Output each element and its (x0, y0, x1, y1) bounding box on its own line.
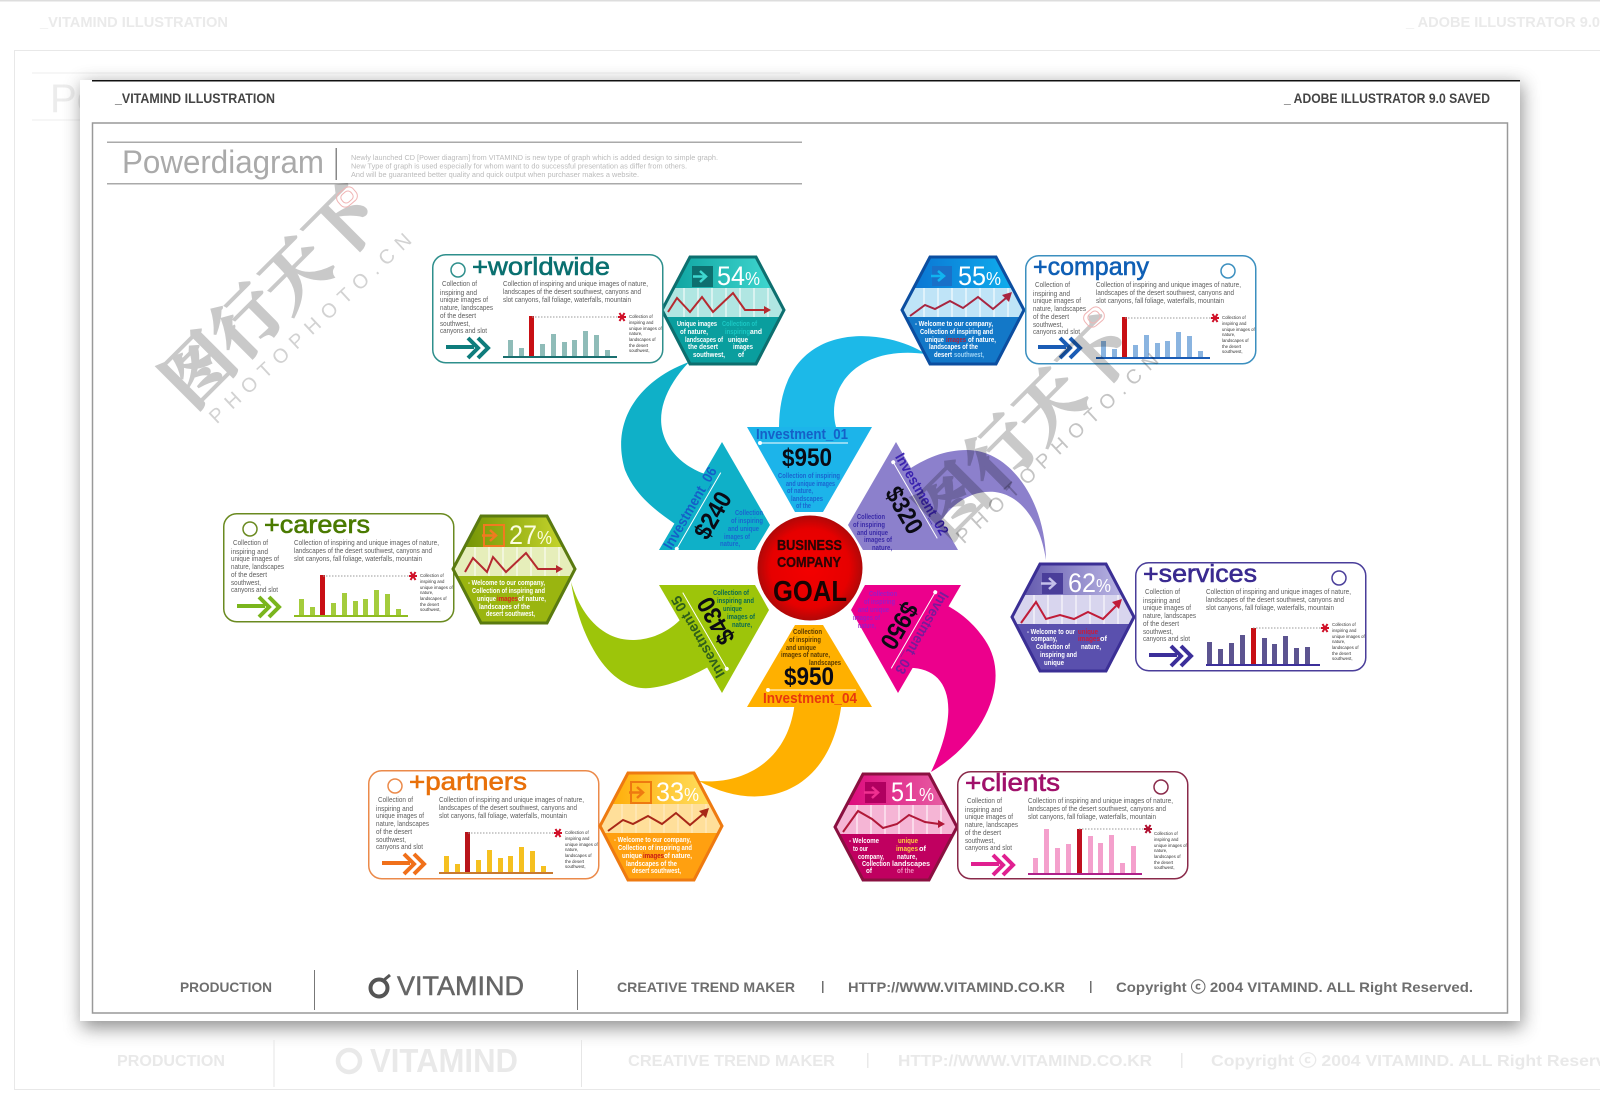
card: partners: canyons and slot (376, 842, 424, 851)
segment: investment 04 (747, 625, 872, 707)
hexagon: clients 51%: of (919, 844, 926, 853)
card: worldwide: nature, landscapes (440, 303, 493, 312)
hexagon: clients 51%: of (866, 866, 872, 875)
segment: investment 06: nature, (720, 539, 740, 548)
ghost footer: Copyright ⓒ 2004 VITAMIND. ALL Right Reserved. (1211, 1051, 1600, 1070)
card: clients: slot canyons, fall foliage, waterfalls, mountain (1028, 812, 1156, 821)
line chart (843, 811, 945, 832)
card: careers: inspiring and (420, 579, 445, 584)
hexagon: careers 27%: % (537, 528, 552, 548)
percent: 33 (656, 777, 684, 807)
card: worldwide: Collection of (629, 314, 653, 319)
segment: investment 03: and unique (858, 605, 889, 614)
segment: investment 01: landscapes (791, 494, 823, 503)
card: services: Collection of inspiring and unique images of nature, (1206, 587, 1351, 596)
hexagon: partners 33%: Collection of inspiring and (618, 843, 692, 852)
card: company: nature, landscapes (1033, 304, 1086, 313)
card: partners: slot canyons, fall foliage, waterfalls, mountain (439, 811, 567, 820)
segment: investment 05: $430 (692, 592, 741, 649)
segment: investment 06: $240 (689, 487, 738, 544)
icon (629, 782, 651, 803)
card: services: landscapes of the desert southwest, canyons and (1206, 595, 1344, 604)
line chart (465, 553, 563, 573)
card: careers: landscapes of the desert southwest, canyons and (294, 546, 432, 555)
hexagon: clients 51%: images (896, 844, 918, 853)
line chart (910, 292, 1012, 316)
card: services: nature, (1332, 639, 1345, 644)
arrow (446, 338, 488, 358)
hexagon: careers 27% (453, 516, 575, 623)
hexagon: company 55%: images (946, 335, 966, 344)
description: Newly launched CD [Power diagram] from VITAMIND is new type of graph which is added design to simple graph. (351, 155, 718, 162)
hexagon: company 55%: of nature, (968, 335, 996, 344)
card: services: inspiring and (1143, 596, 1180, 605)
card: careers: southwest, (231, 578, 261, 587)
hexagon: partners 33%: % (684, 785, 699, 805)
hexagon: services 62%: unique (1078, 627, 1098, 636)
card: clients (958, 769, 1188, 879)
hexagon: careers 27%: of nature, (518, 594, 546, 603)
bar chart (294, 572, 417, 617)
card: company: slot canyons, fall foliage, waterfalls, mountain (1096, 296, 1224, 305)
icon (692, 266, 713, 287)
hexagon: careers 27%: - Welcome to our company, (468, 578, 545, 587)
arrow: teal to investment 06 (621, 362, 705, 524)
watermark: right: PHOTOPHOTO.CN (952, 349, 1163, 548)
hexagon: worldwide 54% (662, 257, 784, 364)
percent: 51 (891, 777, 917, 807)
hexagon: clients 51%: of the (897, 866, 914, 875)
percent: 55 (958, 261, 986, 291)
card: worldwide: southwest, (629, 348, 650, 353)
card: careers: southwest, (420, 607, 441, 612)
card: services: the desert (1332, 651, 1352, 656)
hexagon: careers 27%: images (497, 594, 518, 603)
card: company: southwest, (1033, 320, 1063, 329)
card: careers: unique images of (231, 554, 280, 563)
segment: investment 05: images of (727, 612, 755, 621)
main white panel (80, 80, 1520, 1021)
segment: investment 04: images of nature, (781, 650, 830, 659)
hexagon: services 62%: company, (1031, 634, 1057, 643)
segment: investment 03: Collection (869, 589, 897, 598)
card: company: canyons and slot (1033, 327, 1081, 336)
card: clients: Collection of inspiring and unique images of nature, (1028, 796, 1173, 805)
segment: investment 04: Collection (793, 627, 822, 636)
card: partners (369, 768, 599, 879)
line chart (608, 808, 709, 831)
card: careers: slot canyons, fall foliage, waterfalls, mountain (294, 554, 422, 563)
card: partners: of the desert (376, 827, 413, 836)
segment: investment 02 (848, 442, 958, 553)
footer: PRODUCTION (180, 979, 272, 995)
hexagon: careers 27%: landscapes of the (479, 602, 530, 611)
card: services: unique images of (1143, 603, 1192, 612)
card: partners: nature, landscapes (376, 819, 429, 828)
percent: 27 (509, 520, 537, 550)
header left label: _VITAMIND ILLUSTRATION (114, 90, 275, 106)
card: clients: Collection of (1154, 831, 1178, 836)
card: services: inspiring and (1332, 628, 1357, 633)
card: careers: Collection of inspiring and unique images of nature, (294, 538, 439, 547)
card: worldwide: inspiring and (629, 320, 654, 325)
card: company: Collection of (1222, 315, 1246, 320)
hexagon: clients 51%: nature, (897, 852, 917, 861)
segment: investment 03 (851, 574, 961, 693)
arrow: pink to investment 03 (905, 600, 996, 772)
card: company: landscapes of (1222, 338, 1249, 343)
hexagon: clients 51%: to our (853, 844, 868, 853)
card: services: southwest, (1332, 656, 1353, 661)
icon (864, 782, 886, 803)
card: company: of the desert (1033, 312, 1070, 321)
segment: investment 02: $320 (879, 482, 928, 539)
hexagon: services 62%: nature, (1081, 642, 1101, 651)
arrow: green to investment 05 (571, 582, 710, 688)
hexagon: worldwide 54%: unique (728, 335, 748, 344)
ghost page backdrop: _VITAMIND ILLUSTRATION (39, 14, 228, 31)
hexagon: partners 33%: desert southwest, (632, 866, 681, 875)
segment: investment 03: Investment_03 (891, 589, 951, 676)
icon (482, 525, 504, 546)
card: clients: unique images of (965, 812, 1014, 821)
centre goal circle: BUSINESS (777, 537, 842, 554)
arrow: purple to investment 02 (905, 450, 1046, 560)
description: New Type of graph is used especially for whom want to do successful presentation as differ from others. (351, 164, 687, 170)
hexagon: worldwide 54%: images (733, 342, 753, 351)
description (351, 155, 718, 179)
segment: investment 06: of inspiring (731, 516, 763, 525)
ghost footer (117, 1040, 1600, 1087)
card: worldwide: slot canyons, fall foliage, waterfalls, mountain (503, 295, 631, 304)
card: careers (224, 511, 454, 622)
card: clients: nature, (1154, 848, 1167, 853)
card: worldwide: unique images of (440, 295, 489, 304)
description: And will be guaranteed better quality and quick output when purchaser makes a website. (351, 172, 639, 179)
title: Powerdiagram (122, 144, 324, 180)
card: clients: of the desert (965, 828, 1002, 837)
hexagon: clients 51%: - Welcome (849, 836, 879, 845)
watermark: right: 图行天下 (891, 294, 1153, 556)
card: clients: unique images of (1154, 843, 1188, 848)
hexagon: services 62%: unique (1044, 658, 1064, 667)
card: partners: landscapes of (565, 853, 592, 858)
watermark: top left: 图行天下 (137, 163, 399, 425)
card: worldwide: Collection of (442, 279, 478, 288)
card: partners: Collection of inspiring and unique images of nature, (439, 795, 584, 804)
card: services: landscapes of (1332, 645, 1359, 650)
hexagon: company 55%: unique (925, 335, 944, 344)
card: company: inspiring and (1033, 289, 1070, 298)
segment: investment 01: Collection of inspiring (778, 471, 840, 480)
segment: investment 06: Collection (735, 508, 763, 517)
percent: 62 (1068, 568, 1096, 598)
segment: investment 05 (659, 578, 769, 693)
hexagon: company 55% (902, 257, 1024, 364)
panel shadow (82, 84, 1522, 1028)
card: worldwide: unique images of (629, 326, 663, 331)
card: careers: Collection of (233, 538, 269, 547)
heading: +company (1033, 253, 1149, 281)
card: clients: nature, landscapes (965, 820, 1018, 829)
card: worldwide: the desert (629, 343, 649, 348)
heading: +services (1143, 560, 1257, 588)
hexagon: worldwide 54%: Collection of (722, 319, 757, 328)
card: services: Collection of (1332, 622, 1356, 627)
hexagon: partners 33%: landscapes of the (626, 859, 677, 868)
segment: investment 03: of inspiring (864, 597, 895, 606)
card: careers: Collection of (420, 573, 444, 578)
hexagon: worldwide 54%: and (750, 327, 762, 336)
hexagon: clients 51%: Collection (862, 859, 890, 868)
card: company: unique images of (1222, 327, 1256, 332)
centre goal circle (758, 516, 862, 620)
card: worldwide (433, 253, 663, 363)
centre goal circle: COMPANY (777, 554, 841, 571)
segment: investment 01: $950 (782, 444, 832, 472)
card: careers: canyons and slot (231, 585, 279, 594)
hexagon: clients 51%: company, (858, 852, 884, 861)
segment: investment 02: nature, (872, 543, 892, 552)
card: partners: unique images of (565, 842, 599, 847)
card: clients: landscapes of the desert southwest, canyons and (1028, 804, 1166, 813)
hexagon: partners 33% (600, 773, 722, 880)
hexagon: partners 33%: - Welcome to our company, (614, 835, 691, 844)
card: services: slot canyons, fall foliage, waterfalls, mountain (1206, 603, 1334, 612)
hexagon: partners 33%: of nature, (664, 851, 692, 860)
icon (931, 266, 952, 286)
hexagon: worldwide 54%: % (745, 269, 760, 289)
segment: investment 03: $950 (874, 597, 923, 654)
footer: Copyright ⓒ 2004 VITAMIND. ALL Right Reserved. (1116, 979, 1473, 995)
heading: +partners (409, 768, 527, 796)
card: services (1136, 560, 1366, 671)
ghost page backdrop: _ ADOBE ILLUSTRATOR 9.0 (1405, 14, 1600, 31)
segment: investment 02: images of (864, 535, 892, 544)
hexagon: services 62%: - Welcome to our (1027, 627, 1075, 636)
ghost footer: PRODUCTION (117, 1053, 225, 1070)
card: company: inspiring and (1222, 321, 1247, 326)
hexagon: worldwide 54%: the desert (688, 342, 718, 351)
card: partners: landscapes of the desert southwest, canyons and (439, 803, 577, 812)
hexagon: worldwide 54%: Unique images (677, 319, 717, 328)
heading: +worldwide (472, 253, 610, 281)
card: services: canyons and slot (1143, 634, 1191, 643)
card: partners: Collection of (378, 795, 414, 804)
hexagon: worldwide 54%: of nature, (680, 327, 708, 336)
heading: +clients (965, 769, 1060, 797)
hexagon: services 62%: % (1096, 576, 1111, 596)
card: worldwide: landscapes of the desert southwest, canyons and (503, 287, 641, 296)
bar chart (439, 829, 562, 874)
segment: investment 05: inspiring and (717, 596, 754, 605)
bar chart (1096, 314, 1219, 359)
card: services: southwest, (1143, 627, 1173, 636)
card: clients: inspiring and (1154, 837, 1179, 842)
segment: investment 02: and unique (857, 528, 888, 537)
hexagon: clients 51%: % (919, 785, 934, 805)
centre goal circle: GOAL (773, 576, 847, 608)
line chart (1021, 599, 1122, 623)
segment: investment 02: Collection (857, 512, 885, 521)
hexagon: company 55%: - Welcome to our company, (915, 319, 993, 328)
card: careers: inspiring and (231, 547, 268, 556)
segment: investment 04: Investment_04 (763, 691, 857, 707)
segment: investment 06: and unique (728, 524, 759, 533)
segment: investment 01 (747, 427, 872, 512)
percent: 54 (717, 261, 745, 291)
card: clients: landscapes of (1154, 854, 1181, 859)
card: services: of the desert (1143, 619, 1180, 628)
card: clients: inspiring and (965, 805, 1002, 814)
card: clients: Collection of (967, 796, 1003, 805)
segment: investment 05: Investment 05 (669, 593, 729, 680)
bar chart (1206, 624, 1329, 666)
card: partners: southwest, (376, 835, 406, 844)
card: worldwide: nature, (629, 331, 642, 336)
hexagon: clients 51%: unique (898, 836, 918, 845)
card: partners: nature, (565, 847, 578, 852)
hexagon: company 55%: Collection of inspiring and (920, 327, 993, 336)
arrow: orange to investment 04 (699, 700, 842, 796)
ghost footer: VITAMIND (370, 1042, 518, 1079)
card: services: Collection of (1145, 587, 1181, 596)
card: partners: Collection of (565, 830, 589, 835)
card: worldwide: southwest, (440, 319, 470, 328)
segment: investment 02: Investment_02 (891, 451, 951, 538)
card: worldwide: of the desert (440, 311, 477, 320)
ghost page backdrop: Po (50, 77, 99, 121)
vitamind logo: VITAMIND (397, 971, 524, 1001)
segment: investment 01: of nature, (787, 486, 813, 495)
hexagon: clients 51% (835, 774, 957, 880)
hexagon: services 62%: Collection of (1036, 642, 1070, 651)
card: services: nature, landscapes (1143, 611, 1196, 620)
ghost footer: CREATIVE TREND MAKER (628, 1053, 835, 1070)
hexagon: services 62%: of (1100, 634, 1107, 643)
card: worldwide: landscapes of (629, 337, 656, 342)
card: company: Collection of (1035, 280, 1071, 289)
hexagon: company 55%: % (986, 269, 1001, 289)
hexagon: worldwide 54%: landscapes of (685, 335, 723, 344)
card: company (1026, 253, 1256, 364)
arrow (382, 854, 424, 874)
card: partners: the desert (565, 859, 585, 864)
card: careers: landscapes of (420, 596, 447, 601)
header right label: _ ADOBE ILLUSTRATOR 9.0 SAVED (1283, 90, 1490, 106)
hexagon: partners 33%: unique (622, 851, 642, 860)
line chart (668, 293, 771, 314)
card: worldwide: Collection of inspiring and unique images of nature, (503, 279, 648, 288)
segment: investment 06: Investment_06 (661, 465, 721, 552)
bar chart (503, 313, 626, 358)
card: careers: of the desert (231, 570, 268, 579)
arrow (1038, 338, 1080, 358)
hexagon: company 55%: southwest, (954, 350, 984, 359)
footer: CREATIVE TREND MAKER (617, 979, 795, 995)
hexagon: worldwide 54%: of (738, 350, 744, 359)
arrow (971, 855, 1013, 875)
segment: investment 01: and unique images (786, 479, 835, 488)
segment: investment 02: of inspiring (853, 520, 885, 529)
card: worldwide: inspiring and (440, 288, 477, 297)
segment: investment 03: nature, (858, 621, 876, 630)
segment: investment 06: images of (724, 532, 750, 541)
segment: investment 05: unique (723, 604, 742, 613)
hexagon: worldwide 54%: inspiring (725, 327, 750, 336)
segment: investment 04: landscapes (809, 658, 841, 667)
card: partners: southwest, (565, 864, 586, 869)
hexagon: services 62% (1012, 564, 1134, 671)
segment: investment 05: Collection of (713, 588, 749, 597)
card: careers: unique images of (420, 585, 454, 590)
footer (180, 970, 1473, 1010)
segment: investment 06 (659, 442, 770, 567)
hexagon: clients 51%: landscapes (892, 859, 930, 868)
card: clients: southwest, (965, 836, 995, 845)
arrow (1149, 646, 1191, 666)
card: careers: nature, landscapes (231, 562, 284, 571)
card: clients: southwest, (1154, 865, 1175, 870)
card: company: Collection of inspiring and unique images of nature, (1096, 280, 1241, 289)
card: clients: the desert (1154, 860, 1174, 865)
card: company: unique images of (1033, 296, 1082, 305)
card: company: southwest, (1222, 349, 1243, 354)
card: company: the desert (1222, 344, 1242, 349)
segment: investment 04: $950 (784, 663, 834, 691)
segment: investment 01: Investment_01 (756, 427, 848, 443)
hexagon: services 62%: images (1078, 634, 1100, 643)
title block (107, 142, 802, 184)
card: services: unique images of (1332, 634, 1366, 639)
footer: HTTP://WWW.VITAMIND.CO.KR (848, 979, 1065, 995)
card: company: nature, (1222, 332, 1235, 337)
hexagon: careers 27%: unique (477, 594, 496, 603)
card: partners: unique images of (376, 811, 425, 820)
arrow: blue to investment 01 (779, 336, 926, 427)
hexagon: worldwide 54%: southwest, (693, 350, 725, 359)
hexagon: company 55%: desert (934, 350, 952, 359)
segment: investment 05: nature, (732, 620, 752, 629)
card: clients: canyons and slot (965, 843, 1013, 852)
card: partners: inspiring and (565, 836, 590, 841)
icon (1041, 573, 1063, 594)
card: partners: inspiring and (376, 804, 413, 813)
segment: investment 01: of the (796, 501, 811, 510)
segment: investment 03: images of (853, 613, 880, 622)
hexagon: partners 33%: images (643, 851, 664, 860)
hexagon: careers 27%: Collection of inspiring and (472, 586, 545, 595)
card: worldwide: canyons and slot (440, 326, 488, 335)
heading: +careers (264, 511, 370, 539)
card: careers: nature, (420, 590, 433, 595)
bar chart (1028, 825, 1152, 875)
hexagon: company 55%: landscapes of the (929, 342, 978, 351)
ghost footer: HTTP://WWW.VITAMIND.CO.KR (898, 1053, 1152, 1070)
segment: investment 04: and unique (786, 643, 816, 652)
hexagon: services 62%: inspiring and (1040, 650, 1077, 659)
watermark: top left: PHOTOPHOTO.CN (205, 229, 416, 428)
segment: investment 04: of inspiring (789, 635, 821, 644)
arrow (237, 597, 279, 617)
hexagon: careers 27%: desert southwest, (486, 609, 535, 618)
card: company: landscapes of the desert southwest, canyons and (1096, 288, 1234, 297)
card: careers: the desert (420, 602, 440, 607)
